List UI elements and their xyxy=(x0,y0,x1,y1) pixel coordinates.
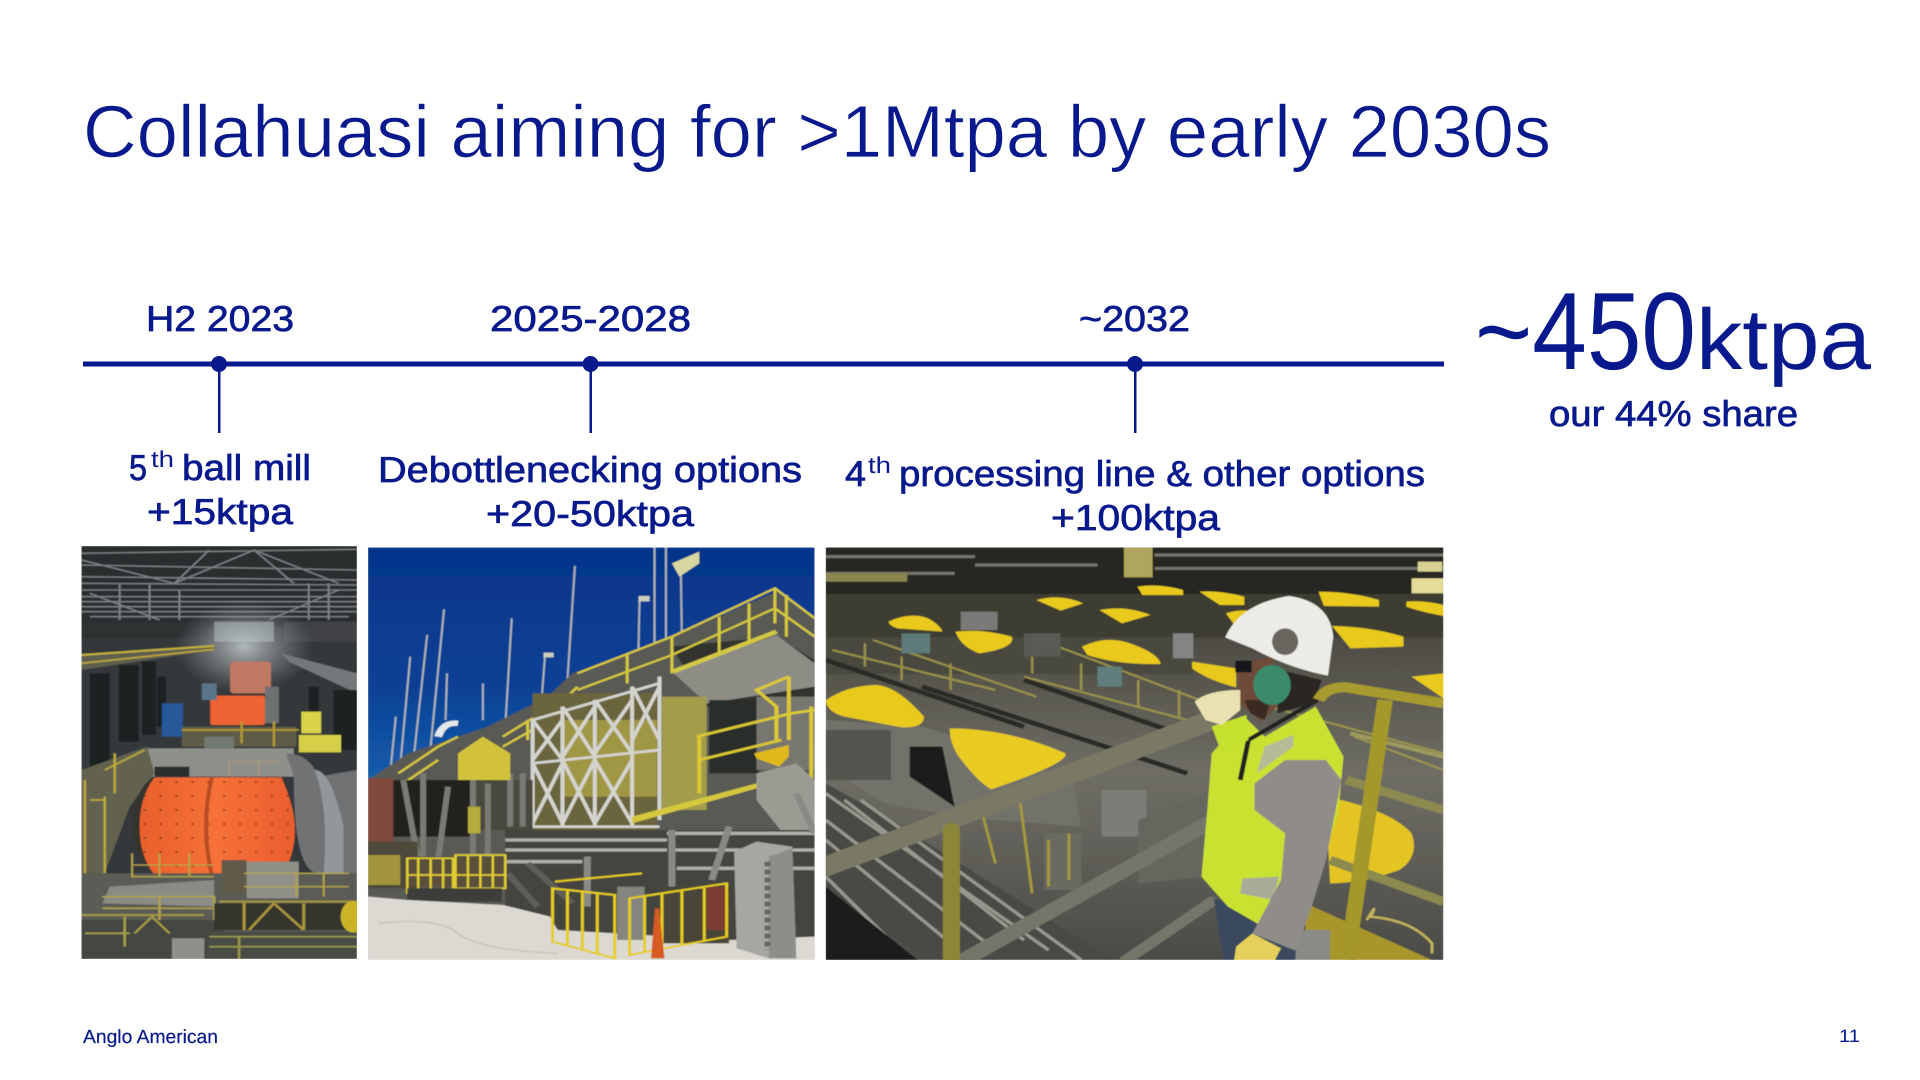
sleeve xyxy=(1252,760,1341,951)
big mill xyxy=(140,777,295,875)
share note: our 44% share xyxy=(1549,393,1798,434)
right-hand rail and post xyxy=(1319,687,1443,703)
photo: worker overlooking flotation cells xyxy=(826,547,1443,960)
left stairs xyxy=(81,747,155,873)
roof xyxy=(81,546,357,626)
big figure: ~450ktpa xyxy=(1475,270,1871,393)
yellow handrails xyxy=(398,588,815,787)
side walkways xyxy=(81,645,214,670)
timeline xyxy=(83,356,1444,433)
glove and arm xyxy=(1212,715,1248,753)
brick building xyxy=(368,778,394,842)
helmet xyxy=(1225,596,1333,676)
milestone text: 5th ball mill: +15ktpa xyxy=(147,491,294,532)
yellow barrier fence xyxy=(553,873,727,958)
columns xyxy=(90,662,357,767)
traffic cone xyxy=(651,908,664,958)
poles xyxy=(389,547,684,766)
large lower-right cover xyxy=(1326,797,1414,883)
milestone text: 4th processing line: 4 xyxy=(845,453,866,494)
milestone text: 5th ball mill: 5 xyxy=(129,447,147,488)
big figure: ~450ktpa: ktpa xyxy=(1696,292,1871,388)
milestone marker: H2 2023 xyxy=(211,356,227,433)
date label: H2 2023: H2 2023 xyxy=(146,298,294,339)
lower-left machines xyxy=(826,720,1081,827)
milestone text: 4th processing line: th xyxy=(868,452,891,478)
milestone text: debottlenecking options: +20-50ktpa xyxy=(486,493,695,534)
big figure: ~450ktpa: ~450 xyxy=(1475,270,1696,393)
milestone text: 5th ball mill xyxy=(129,446,311,532)
conveyors xyxy=(826,784,1058,929)
date label: 2025-2028: 2025-2028 xyxy=(490,298,691,339)
lower decks xyxy=(505,830,815,940)
title: Collahuasi aiming for >1Mtpa by early 2030s xyxy=(83,90,1551,173)
footer logo text: Anglo American xyxy=(83,1027,218,1048)
right side piping xyxy=(662,697,707,810)
page number: 11 xyxy=(1839,1026,1860,1046)
milestone marker: 2025-2028 xyxy=(582,356,598,433)
electrical cabinet xyxy=(734,842,796,958)
equipment mid band xyxy=(832,640,1443,770)
overhead xyxy=(826,547,1443,594)
handrails xyxy=(826,722,1212,960)
left section xyxy=(393,780,473,837)
large yellow covers xyxy=(826,685,924,727)
milestone text: 4th processing line: +100ktpa xyxy=(1051,497,1221,538)
distant mills xyxy=(230,662,271,693)
yellow covers xyxy=(889,586,1443,698)
photo: ball mill hall xyxy=(81,546,366,959)
photo: plant exterior under blue sky xyxy=(368,547,815,960)
lattice xyxy=(533,693,657,830)
milestone text: 5th ball mill: th xyxy=(151,446,174,472)
ground xyxy=(368,897,815,960)
jeans xyxy=(1214,898,1297,960)
milestone text: 4th processing line xyxy=(845,452,1425,538)
structure mass xyxy=(368,592,815,906)
milestone text: debottlenecking options: Debottlenecking options xyxy=(378,449,802,490)
left yellow fence xyxy=(368,842,418,888)
date label: ~2032: ~2032 xyxy=(1079,298,1190,339)
hair and beard xyxy=(1277,670,1322,713)
milestone marker: ~2032 xyxy=(1127,356,1143,433)
platform xyxy=(82,872,357,932)
milestone text: 5th ball mill: ball mill xyxy=(182,447,311,488)
gas cylinder and hoses xyxy=(617,887,645,940)
end rings xyxy=(286,753,357,873)
neck cord xyxy=(1240,700,1318,780)
worker xyxy=(1195,596,1343,960)
safety vest xyxy=(1201,707,1343,927)
mid floor xyxy=(145,748,294,777)
milestone text: 4th processing line: processing line & other options xyxy=(899,453,1425,494)
milestone text: debottlenecking options xyxy=(378,449,802,534)
hearing protection xyxy=(1253,665,1291,705)
